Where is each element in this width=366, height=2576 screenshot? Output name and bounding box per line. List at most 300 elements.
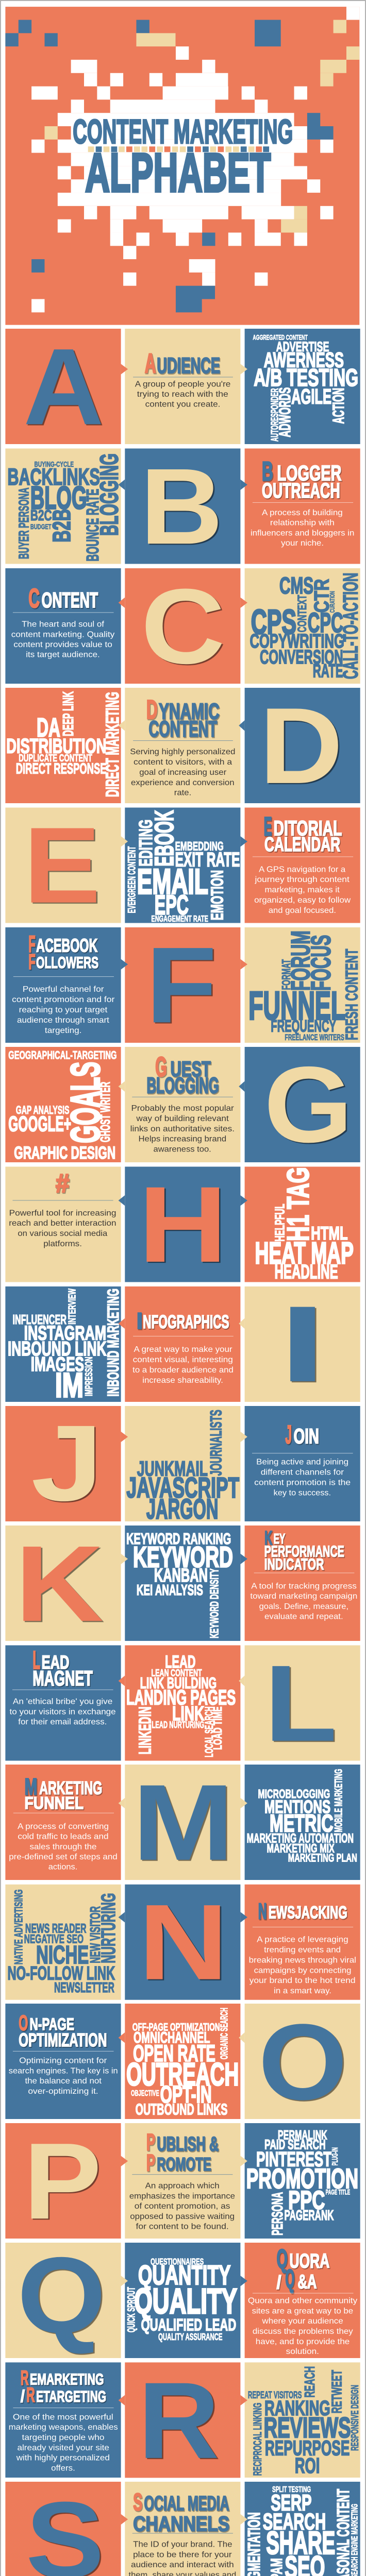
arrow: P to Publish: [121, 2156, 128, 2166]
description: Quora: have, and to provide the: [256, 2337, 350, 2346]
panel: O word cloud: OUTBOUND LINKS: [136, 2101, 227, 2119]
description: Quora: [248, 2293, 357, 2356]
panel: Q word cloud: QUALITY: [134, 2281, 237, 2321]
panel: O word cloud: ORGANIC SEARCH: [219, 2008, 230, 2059]
panel: I word cloud: INTERVIEW: [66, 1289, 78, 1325]
arrow: Infographics to words: [119, 1318, 125, 1329]
panel: letter A: A: [23, 326, 104, 448]
heading: Lead Magnet: EAD: [42, 1651, 69, 1673]
heading: Marketing Funnel: M: [25, 1773, 37, 1800]
heading: Content: ONTENT: [42, 588, 98, 613]
arrow: L to words: [239, 1675, 245, 1686]
description: Editorial Calendar: [253, 856, 353, 914]
heading: Remarketing / Retargeting: R: [26, 2383, 35, 2406]
panel: J word cloud: JUNKMAIL: [137, 1456, 208, 1480]
description: Publish and Promote: opposed to passive waiting: [130, 2212, 235, 2221]
heading: Key Performance Indicator: EY: [274, 1531, 285, 1547]
description: Join: Being active and joining: [256, 1458, 348, 1466]
panel: Guest Blogging description: [125, 1047, 240, 1162]
panel: N word cloud: NEWS READER: [25, 1921, 87, 1936]
panel: On-Page Optimization description: [5, 2004, 121, 2119]
description: Guest Blogging: links on authoritative sites.: [130, 1124, 235, 1133]
panel: I word cloud: [5, 1286, 123, 1405]
panel: N word cloud: [5, 1885, 121, 2000]
panel: Q word cloud: [125, 2243, 240, 2358]
panel: R word cloud: ROI: [295, 2454, 320, 2478]
description: On-Page Optimization: Optimizing content for: [19, 2056, 107, 2065]
description: Content: [11, 612, 114, 659]
panel: K word cloud: KANBAN: [154, 1564, 208, 1586]
heading: On-Page Optimization: O: [19, 2011, 28, 2035]
description: Join: key to success.: [274, 1488, 331, 1497]
panel: C word cloud: CPS: [251, 603, 296, 641]
panel: Remarketing description: [5, 2362, 121, 2478]
heading: Guest Blogging: [146, 1051, 219, 1098]
panel: letter I: I: [279, 1284, 326, 1404]
description: Marketing Funnel: cold traffic to leads and: [18, 1832, 109, 1841]
panel: Lead Magnet description: [5, 1646, 121, 1761]
panel: M word cloud: MOBILE MARKETING: [333, 1769, 345, 1832]
panel: N word cloud: NEGATIVE SEO: [24, 1932, 84, 1946]
description: Remarketing: marketing weapons, enables: [9, 2422, 118, 2431]
panel: E word cloud: [125, 808, 240, 924]
panel: S word cloud: SEARCH ENGINE MARKETING: [350, 2504, 360, 2576]
panel: E word cloud: EPC: [155, 890, 189, 920]
description: Publish and Promote: [129, 2174, 235, 2231]
description: Facebook Followers: reaching to your target: [19, 1005, 107, 1014]
panel: O word cloud: OPEN RATE: [133, 2040, 215, 2066]
description: Newsjacking: in a smart way.: [274, 1986, 331, 1995]
panel: P word cloud: PLUG-IN: [331, 2147, 340, 2165]
panel: F word cloud: FOCUS: [306, 935, 337, 991]
panel: L word cloud: LANDING PAGES: [126, 1686, 236, 1709]
heading: Audience: UDIENCE: [157, 353, 220, 378]
heading: Quora / Q&A: /: [277, 2272, 281, 2293]
panel: R word cloud: RETWEET: [329, 2370, 345, 2413]
description: Hashtag: platforms.: [43, 1239, 82, 1248]
panel: B word cloud: BUYING-CYCLE: [35, 460, 74, 469]
arrow: S to Social: [121, 2514, 128, 2524]
description: Infographics: A great way to make your: [134, 1345, 232, 1354]
description: Social Media Channels: The ID of your brand. The: [133, 2539, 232, 2549]
panel: N word cloud: NO-FOLLOW LINK: [7, 1962, 115, 1984]
heading: Guest Blogging: G: [155, 1051, 167, 1082]
panel: Hashtag description: [5, 1166, 121, 1282]
panel: F word cloud: FORUM: [286, 930, 315, 991]
description: Content: content provides value to: [13, 640, 112, 649]
arrow: R to words: [240, 2395, 247, 2405]
panel: F word cloud: FORMAT: [280, 959, 293, 990]
panel: D word cloud: [5, 688, 123, 803]
description: Quora: solution.: [286, 2347, 319, 2356]
panel: letter N: N: [139, 1882, 228, 2002]
heading: Quora / Q&A: [277, 2244, 329, 2294]
panel: F word cloud: [245, 927, 361, 1043]
description: Editorial Calendar: and goal focused.: [269, 906, 336, 914]
panel: Facebook Followers description: [5, 927, 121, 1043]
description: Publish and Promote: emphasizes the importance: [129, 2191, 235, 2200]
panel: letter B: B: [140, 447, 223, 567]
description: Newsjacking: [249, 1927, 356, 1995]
heading: Newsjacking: [258, 1899, 347, 1924]
panel: K word cloud: KEYWORD: [133, 1541, 233, 1573]
panel: L word cloud: LINK: [172, 1703, 205, 1725]
arrow: R to Remarketing: [119, 2395, 125, 2405]
description: On-Page Optimization: over-optimizing it.: [28, 2087, 98, 2096]
panel: C word cloud: CONTEXT: [295, 595, 309, 632]
description: Hashtag: reach and better interaction: [9, 1218, 116, 1228]
header mosaic with title: [5, 7, 359, 325]
description: On-Page Optimization: [9, 2051, 118, 2096]
arrow: H to hashtag: [119, 1195, 125, 1206]
panel: H word cloud: H1 TAG: [281, 1167, 315, 1241]
heading: Guest Blogging: UEST: [171, 1057, 211, 1081]
panel: A word cloud: AUTORESPONDER: [269, 388, 280, 442]
panel: N word cloud: NURTURING: [98, 1893, 120, 1963]
description: Join: different channels for: [261, 1468, 344, 1477]
arrow: N to words: [119, 1912, 125, 1923]
description: Social Media Channels: audience and interact with: [131, 2560, 234, 2569]
arrow: C to words: [240, 598, 247, 608]
description: Content: its target audience.: [26, 650, 100, 659]
description: Facebook Followers: content promotion and for: [12, 995, 114, 1004]
heading: Quora / Q&A: &A: [297, 2271, 317, 2293]
title: Content Marketing Alphabet: [73, 112, 293, 204]
panel: G word cloud: GHOST WRITER: [98, 1082, 113, 1142]
arrow: N to Newsjacking: [240, 1912, 247, 1923]
panel: B word cloud: BOUNCE RATE: [84, 489, 103, 562]
description: Social Media Channels: place to be there for your: [133, 2550, 232, 2559]
panel: O word cloud: [125, 2004, 240, 2119]
description: Blogger Outreach: [251, 502, 354, 547]
heading: Social Media Channels: [133, 2488, 229, 2535]
panel: C word cloud: CTR: [310, 579, 333, 613]
panel: B word cloud: [5, 448, 124, 564]
panel: K word cloud: KEYWORD DENSITY: [208, 1568, 221, 1638]
description: Editorial Calendar: journey through content: [254, 875, 350, 884]
heading: Key Performance Indicator: K: [264, 1527, 272, 1549]
panel: J word cloud: [125, 1406, 240, 1525]
panel: letter E: E: [24, 805, 101, 926]
description: Blogger Outreach: A process of building: [262, 508, 343, 517]
panel: G word cloud: GEOGRAPHICAL-TARGETING: [8, 1049, 117, 1062]
heading: Facebook Followers: [28, 931, 98, 974]
arrow: G to Guest Blogging: [239, 1081, 245, 1092]
heading: Facebook Followers: F: [28, 950, 36, 974]
heading: Marketing Funnel: [25, 1773, 102, 1813]
panel: Quora description: [245, 2243, 360, 2358]
description: Guest Blogging: [130, 1097, 235, 1154]
arrow: Publish to words: [240, 2156, 247, 2166]
heading: Editorial Calendar: E: [264, 812, 272, 841]
panel: D word cloud: DEEP LINK: [60, 691, 77, 736]
panel: letter F: F: [146, 925, 217, 1046]
panel: A word cloud: ADWORDS: [276, 387, 294, 437]
panel: letter L: L: [264, 1643, 337, 1764]
arrow: C to Content: [119, 598, 125, 608]
heading: Join: OIN: [294, 1424, 319, 1448]
panel: E word cloud: EVERGREEN CONTENT: [126, 846, 138, 913]
panel: E word cloud: EDITING: [135, 820, 156, 867]
panel: R word cloud: REPEAT VISITORS: [248, 2389, 302, 2401]
description: Marketing Funnel: actions.: [48, 1862, 77, 1871]
panel: M word cloud: [245, 1765, 360, 1880]
heading: Lead Magnet: L: [32, 1646, 40, 1674]
description: Audience: A group of people you're: [135, 379, 230, 388]
heading: Remarketing / Retargeting: /: [21, 2387, 25, 2405]
panel: L word cloud: LINK BUILDING: [140, 1675, 217, 1692]
description: Facebook Followers: Powerful channel for: [23, 985, 104, 994]
arrow: words to Editorial Calendar: [240, 836, 247, 846]
heading: Social Media Channels: OCIAL MEDIA: [144, 2492, 229, 2515]
description: Marketing Funnel: [9, 1813, 118, 1871]
heading: Lead Magnet: [32, 1646, 93, 1690]
arrow: I to Infographics: [239, 1318, 245, 1329]
panel: N word cloud: NEWSLETTER: [54, 1979, 114, 1995]
heading: Publish and Promote: [146, 2129, 219, 2176]
panel: Audience description: [125, 329, 240, 444]
heading: Infographics: NFOGRAPHICS: [143, 1311, 229, 1332]
description: Infographics: content visual, interesting: [133, 1355, 233, 1364]
description: On-Page Optimization: the balance and not: [25, 2076, 102, 2086]
description: Facebook Followers: audience through smart: [17, 1015, 109, 1024]
panel: B word cloud: BLOG: [30, 480, 87, 516]
panel: G word cloud: GAP ANALYSIS: [16, 1104, 69, 1116]
description: Lead Magnet: [10, 1689, 116, 1726]
description: Content: The heart and soul of: [22, 619, 105, 629]
arrow: words to On-Page: [119, 2032, 125, 2043]
heading: Lead Magnet: MAGNET: [32, 1666, 93, 1690]
panel: S word cloud: SERP: [271, 2491, 311, 2515]
arrow: F to words: [240, 959, 247, 970]
panel: B word cloud: BUYER PERSONA: [16, 487, 32, 559]
arrow: D to Dynamic Content: [239, 720, 245, 731]
panel: H word cloud: HELPFUL: [272, 1204, 288, 1242]
heading: Marketing Funnel: FUNNEL: [25, 1794, 84, 1813]
heading: Join: [285, 1420, 319, 1449]
panel: S word cloud: SPLIT TESTING: [272, 2485, 311, 2494]
description: Remarketing: [9, 2408, 118, 2472]
heading: Blogger Outreach: B: [262, 456, 273, 486]
heading: Dynamic Content: YNAMIC: [159, 699, 220, 724]
heading: Remarketing / Retargeting: [21, 2367, 106, 2406]
heading: Audience: [145, 348, 220, 379]
panel: D word cloud: DISTRIBUTION: [6, 735, 106, 758]
panel: I word cloud: INSTAGRAM: [24, 1322, 106, 1344]
description: Key Performance Indicator: goals. Define, measure,: [259, 1602, 348, 1611]
description: Join: [252, 1453, 353, 1497]
description: Infographics: [132, 1336, 234, 1384]
heading: Dynamic Content: [146, 694, 220, 741]
description: Facebook Followers: targeting.: [45, 1026, 81, 1035]
heading: Remarketing / Retargeting: ETARGETING: [36, 2388, 106, 2405]
panel: B word cloud: B2B: [48, 509, 76, 543]
heading: Quora / Q&A: Q: [277, 2244, 288, 2274]
description: Blogger Outreach: relationship with: [270, 518, 335, 527]
description: Remarketing: already visited your site: [18, 2443, 109, 2452]
panel: E word cloud: EMAIL: [137, 861, 208, 902]
heading: Facebook Followers: F: [28, 931, 36, 957]
heading: Infographics: I: [137, 1308, 143, 1334]
panel: N word cloud: NATIVE ADVERTISING: [13, 1889, 25, 1964]
panel: A word cloud: AGGREGATED CONTENT: [253, 334, 308, 342]
panel: letter I: [245, 1284, 360, 1404]
heading: Facebook Followers: OLLOWERS: [36, 954, 98, 972]
arrow: O to words: [239, 2032, 245, 2043]
arrow: words to KPI: [240, 1554, 247, 1564]
panel: O word cloud: OUTREACH: [126, 2056, 239, 2092]
description: Dynamic Content: [130, 740, 235, 797]
panel: A word cloud: ACTION: [329, 388, 348, 424]
description: On-Page Optimization: search engines. The key is in: [9, 2066, 118, 2075]
heading: Quora / Q&A: Q: [285, 2265, 294, 2294]
panel: letter G: G: [264, 1045, 353, 1165]
description: Dynamic Content: Serving highly personalized: [130, 747, 235, 756]
panel: R word cloud: RECIPROCAL LINKING: [252, 2403, 264, 2476]
panel: letter K: K: [15, 1524, 104, 1644]
panel: Join description: [245, 1406, 360, 1521]
arrow: E to words: [121, 836, 128, 846]
description: Guest Blogging: Helps increasing brand: [139, 1134, 226, 1143]
arrow: words to Lead Magnet: [119, 1675, 125, 1686]
panel: B word cloud: BACKLINKS: [7, 463, 100, 490]
panel: E word cloud: EMOTION: [208, 870, 227, 920]
arrow: K to words: [121, 1554, 128, 1564]
description: Marketing Funnel: pre-defined set of steps and: [9, 1852, 118, 1861]
arrow: Audience to words: [240, 364, 247, 375]
panel: Guest Blogging description: BLOGGING: [146, 1073, 219, 1098]
panel: F word cloud: FRESH CONTENT: [343, 949, 361, 1040]
panel: Newsjacking description: [245, 1885, 360, 2000]
description: Dynamic Content: rate.: [174, 788, 191, 797]
panel: K word cloud: KEI ANALYSIS: [137, 1582, 203, 1598]
panel: L word cloud: LINKEDIN: [136, 1706, 155, 1754]
panel: L word cloud: LOAD TIME: [211, 1706, 225, 1750]
heading: Infographics: [137, 1308, 229, 1334]
panel: C word cloud: CALL-TO-ACTION: [339, 573, 362, 679]
description: Audience: trying to reach with the: [137, 389, 228, 398]
panel: D word cloud: DIRECT MARKETING: [102, 692, 123, 797]
description: Newsjacking: trending events and: [264, 1945, 341, 1954]
description: Social Media Channels: [128, 2533, 236, 2576]
description: Remarketing: with highly personalized: [16, 2453, 110, 2462]
description: Guest Blogging: awareness too.: [153, 1144, 211, 1154]
heading: Facebook Followers: ACEBOOK: [36, 935, 97, 956]
panel: Marketing Funnel description: [5, 1765, 121, 1880]
heading: hash symbol: #: [56, 1169, 70, 1198]
heading: Audience: A: [145, 348, 156, 379]
description: Hashtag: [9, 1200, 116, 1248]
panel: letter P: P: [24, 2121, 102, 2242]
description: Editorial Calendar: organized, easy to follow: [254, 895, 351, 904]
description: Blogger Outreach: your niche.: [281, 538, 324, 547]
panel: L word cloud: LEAN CONTENT: [151, 1667, 202, 1679]
description: Infographics: increase shareability.: [142, 1376, 223, 1384]
panel: G word cloud: GOALS: [63, 1062, 108, 1143]
arrow: M to Marketing Funnel: [119, 1798, 125, 1808]
heading: Key Performance Indicator: [264, 1527, 344, 1573]
heading: Join: J: [285, 1420, 292, 1449]
panel: I word cloud: INFLUENCER: [12, 1313, 66, 1327]
description: Content: content marketing. Quality: [11, 630, 114, 639]
panel: Publish and Promote description: [125, 2123, 240, 2239]
description: Key Performance Indicator: evaluate and repeat.: [264, 1612, 343, 1621]
panel: E word cloud: EXIT RATE: [175, 849, 240, 871]
arrow: Q to words: [121, 2276, 128, 2286]
panel: R word cloud: [245, 2362, 360, 2478]
heading: On-Page Optimization: N-PAGE: [30, 2015, 74, 2033]
panel: P word cloud: [245, 2123, 360, 2239]
description: Hashtag: Powerful tool for increasing: [9, 1208, 116, 1217]
description: Join: content promotion is the: [254, 1478, 351, 1487]
panel: Q word cloud: QUALITY ASSURANCE: [158, 2331, 223, 2342]
panel: Q word cloud: QUANTITY: [138, 2260, 230, 2290]
panel: A word cloud: [245, 329, 360, 444]
panel: J word cloud: JOURNALISTS: [207, 1410, 225, 1476]
description: Lead Magnet: for their email address.: [18, 1717, 107, 1726]
panel: D word cloud: DIRECT RESPONSE: [16, 760, 106, 777]
description: Audience: content you create.: [145, 399, 220, 409]
heading: Social Media Channels: CHANNELS: [133, 2512, 229, 2535]
arrow: M to words: [240, 1798, 247, 1808]
description: Dynamic Content: experience and conversion: [131, 778, 235, 787]
description: Infographics: to a broader audience and: [132, 1365, 234, 1374]
panel: J word cloud: JARGON: [146, 1494, 218, 1525]
panel: Q word cloud: QUICK SPROUT: [126, 2287, 138, 2332]
description: Remarketing: targeting people who: [22, 2433, 104, 2442]
description: Lead Magnet: to your visitors in exchange: [10, 1707, 116, 1716]
heading: Dynamic Content: D: [146, 694, 158, 725]
heading: Social Media Channels: S: [133, 2488, 142, 2516]
panel: L word cloud: LOCAL SEARCH: [203, 1706, 215, 1757]
panel: Social Media Channels description: [125, 2482, 240, 2576]
panel: D word cloud: DUPLICATE CONTENT: [19, 752, 92, 764]
heading: Remarketing / Retargeting: R: [21, 2367, 29, 2389]
panel: E word cloud: EBOOK: [149, 810, 179, 867]
description: Marketing Funnel: A process of converting: [18, 1822, 109, 1831]
arrow: words to Join: [240, 1432, 247, 1442]
description: Quora: where your audience: [262, 2316, 343, 2326]
description: Facebook Followers: [12, 976, 114, 1035]
panel: letter O: O: [258, 2002, 347, 2123]
description: Editorial Calendar: A GPS navigation for a: [259, 865, 346, 874]
panel: E word cloud: EMBEDDING: [175, 839, 224, 853]
panel: E word cloud: ENGAGEMENT RATE: [151, 914, 208, 924]
panel: O word cloud: OFF-PAGE OPTIMIZATION: [132, 2021, 220, 2033]
panel: P word cloud: PERSONA: [269, 2192, 286, 2235]
panel: C word cloud: [245, 568, 362, 684]
panel: N word cloud: NICHE: [36, 1940, 89, 1969]
panel: I word cloud: INBOUND MARKETING: [104, 1289, 123, 1397]
arrow: Facebook to F: [121, 959, 128, 970]
panel: C word cloud: CURATION: [328, 591, 336, 613]
panel: Dynamic Content description: [125, 688, 240, 803]
arrow: B to Blogger Outreach: [240, 480, 247, 490]
panel: N word cloud: NEW VISITOR: [88, 1906, 103, 1963]
panel: G word cloud: [5, 1047, 121, 1163]
heading: Publish and Promote: P: [146, 2150, 155, 2176]
panel: I word cloud: INBOUND LINK: [8, 1338, 107, 1360]
panel: Editorial Calendar description: [245, 808, 360, 923]
panel: L word cloud: LEAD NURTURING: [152, 1720, 204, 1731]
description: Dynamic Content: content to visitors, with a: [134, 757, 232, 767]
description: Marketing Funnel: sales through the: [30, 1842, 96, 1851]
panel: I word cloud: IM: [55, 1366, 84, 1405]
panel: R word cloud: RESPONSIVE DESIGN: [349, 2385, 360, 2451]
heading: Publish and Promote: UBLISH &: [157, 2133, 219, 2156]
description: Key Performance Indicator: [250, 1572, 357, 1621]
panel: B word cloud: BUDGET: [30, 523, 52, 531]
